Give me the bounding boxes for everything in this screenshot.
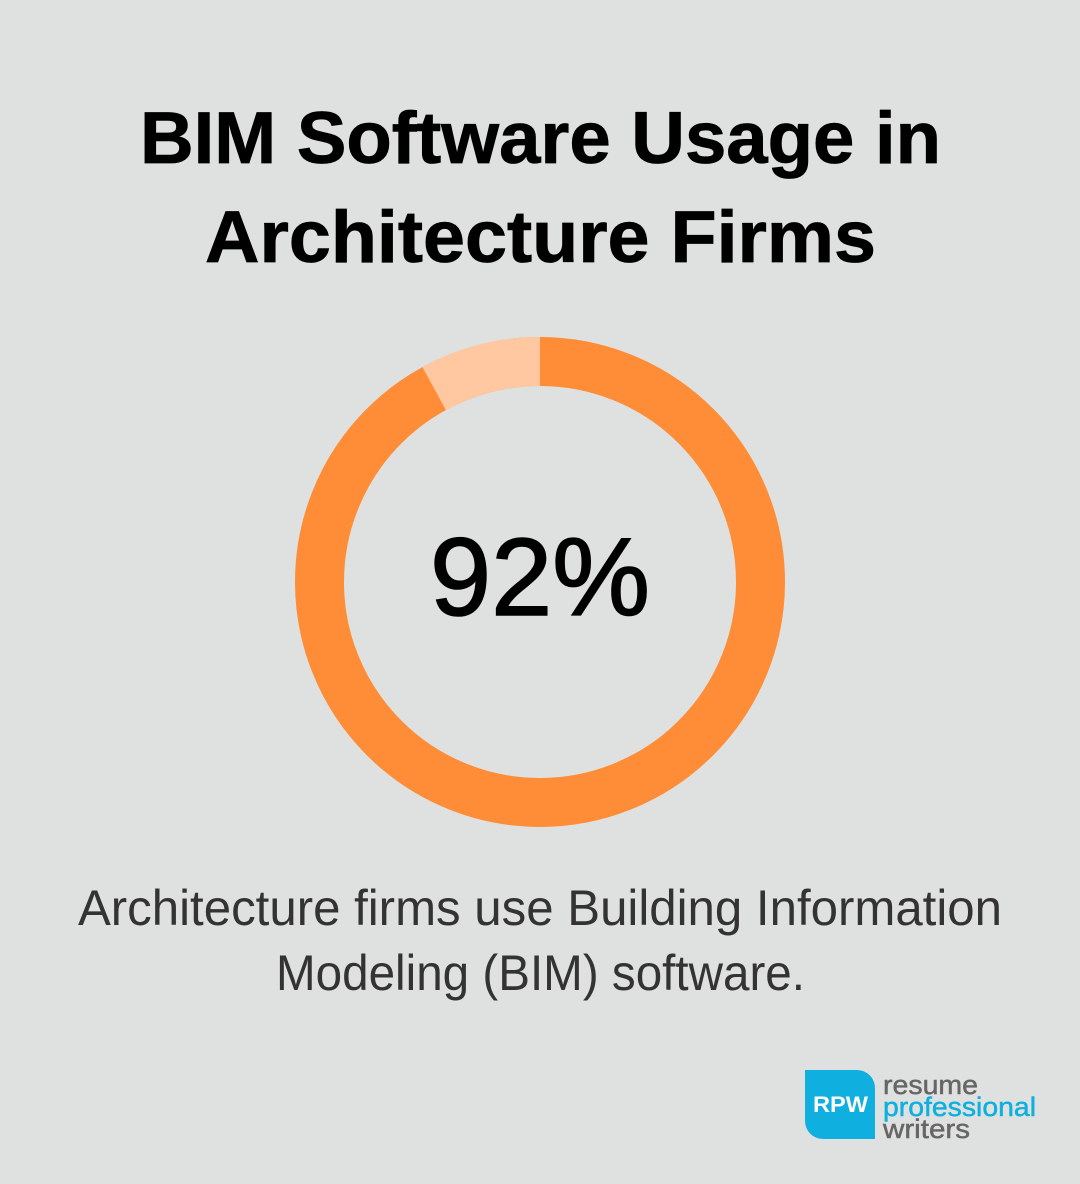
logo wordmark: writers <box>882 1114 970 1144</box>
description text: Modeling (BIM) software. <box>276 945 805 1001</box>
center value: 92% <box>430 516 650 639</box>
logo wordmark <box>882 1070 1036 1144</box>
description text: Architecture firms use Building Information <box>78 880 1002 936</box>
title: Architecture Firms <box>205 197 876 278</box>
donut chart: 92% <box>320 337 760 802</box>
title <box>140 98 941 278</box>
logo wordmark: professional <box>883 1092 1036 1122</box>
logo wordmark: resume <box>883 1070 978 1100</box>
description text <box>78 880 1002 1001</box>
title: BIM Software Usage in <box>140 98 941 179</box>
logo badge <box>805 1070 875 1139</box>
logo: resume professional writers <box>805 1070 1036 1144</box>
logo initials: RPW <box>813 1092 868 1117</box>
donut segment: remaining 8% <box>422 337 540 410</box>
